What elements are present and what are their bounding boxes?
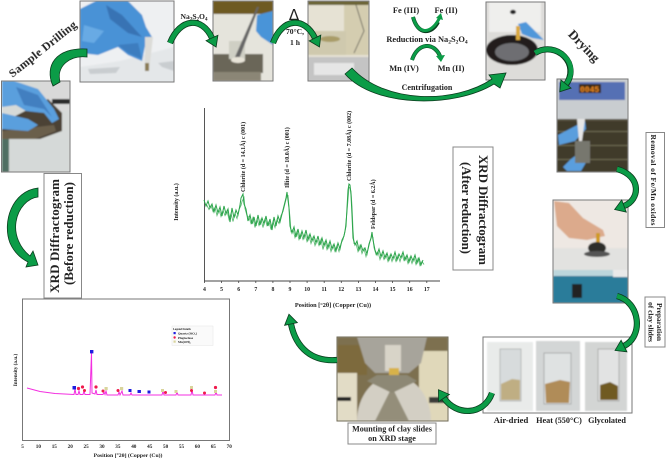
- box: preparation of clay slides: of clay slides: [646, 302, 656, 342]
- label: sodium dithionite: Na: [181, 12, 190, 21]
- x tick labels: 55: [179, 444, 184, 450]
- box: mounting of clay slides: Mounting of clay slides: [352, 424, 432, 434]
- quartz markers: [72, 350, 150, 394]
- peak labels: [239, 111, 377, 229]
- magenta trace: [27, 352, 222, 395]
- x tick labels: 6: [237, 287, 240, 293]
- photo: vortex mixer: [553, 200, 628, 303]
- x axis title: Position [°2θ] (Copper (Cu)): [295, 302, 371, 309]
- photo: drying oven: 0045: [580, 86, 599, 95]
- label: sodium dithionite: 2: [190, 18, 193, 22]
- legend: [172, 326, 213, 346]
- arrow: Mn IV to Mn II: [412, 46, 445, 62]
- label: heat: Heat (550°C): [536, 416, 582, 425]
- x tick labels: 8: [271, 287, 274, 293]
- photo: XRD stage: [337, 337, 448, 421]
- muscovite markers: [104, 386, 217, 393]
- box: mounting of clay slides: [348, 423, 436, 444]
- x tick labels: 14: [373, 287, 378, 293]
- x tick labels: [21, 444, 232, 450]
- heading: sample drilling: Sample Drilling: [6, 17, 79, 80]
- reduction scheme: S: [451, 35, 456, 44]
- reduction scheme: 4: [465, 40, 468, 46]
- label: glycolated: Glycolated: [588, 416, 626, 425]
- x tick labels: 16: [407, 287, 413, 293]
- arrow: Fe III to Fe II: [413, 13, 443, 31]
- box: XRD diffractogram after reduction: (After reduction): [459, 162, 474, 254]
- photo: weighing balance: [308, 1, 369, 81]
- peak labels: Chlorite (d = 14.1Å) c (001): [239, 122, 247, 192]
- label: temperature and time: 1 h: [290, 38, 301, 47]
- x tick labels: 12: [338, 287, 344, 293]
- x tick labels: 13: [356, 287, 361, 293]
- x tick labels: 40: [131, 444, 137, 450]
- label: sodium dithionite: O: [199, 12, 205, 21]
- legend: Quartz (SiO₂): [178, 332, 197, 336]
- x tick labels: 65: [211, 444, 216, 450]
- x tick labels: 10: [36, 444, 41, 450]
- reduction scheme: Mn (II): [438, 64, 465, 73]
- x tick labels: 15: [52, 444, 57, 450]
- box: mounting of clay slides: on XRD stage: [368, 434, 416, 443]
- x tick labels: 9: [289, 287, 292, 293]
- plagioclase markers: [77, 385, 217, 394]
- reduction scheme: [386, 6, 468, 73]
- box: preparation of clay slides: Preparation: [655, 303, 664, 341]
- slide: heated at 550 C: [536, 341, 580, 411]
- label: sodium dithionite: S: [192, 12, 197, 21]
- legend: Legend Details: [173, 328, 192, 331]
- box: removal of Fe/Mn oxides: Removal of Fe/Mn oxides: [649, 134, 658, 226]
- photo: centrifuge: [486, 2, 545, 80]
- peak labels: Feldspar (d = 6.2Å): [369, 179, 377, 229]
- box: XRD diffractogram after reduction: XRD Diffractogram: [476, 155, 491, 265]
- legend: Plagioclase: [178, 336, 194, 340]
- reduction scheme: O: [458, 35, 465, 44]
- reduction scheme: Reduction via Na: [386, 35, 448, 44]
- peak labels: Chlorite (d = 7.08Å) c (002): [345, 111, 353, 181]
- chart: diffractogram after reduction: [173, 108, 440, 309]
- arrow: before-reduction heading to diffractogram: [7, 188, 38, 267]
- y axis title: Intensity (a.u.): [173, 183, 180, 221]
- arrow: beaker to balance: [273, 23, 315, 43]
- arrow: balance to centrifuge: [345, 68, 506, 101]
- reduction scheme: Fe (III): [393, 6, 419, 15]
- box: XRD diffractogram before reduction: [44, 174, 82, 298]
- arrow: oven to vortex: [617, 169, 636, 206]
- y axis title: Intensity (a.u.): [12, 354, 19, 386]
- x tick labels: 15: [390, 287, 396, 293]
- chart: diffractogram before reduction: [12, 299, 232, 459]
- arrow: vortex to slides: [617, 296, 637, 346]
- photo: beaker on balance: [213, 1, 273, 81]
- x tick labels: 20: [68, 444, 73, 450]
- x tick labels: 5: [21, 444, 24, 450]
- x tick labels: 50: [163, 444, 169, 450]
- arrow: slides to XRD stage: [444, 393, 492, 411]
- box: preparation of clay slides: [645, 297, 665, 347]
- x tick labels: [203, 287, 430, 293]
- x tick labels: 17: [424, 287, 430, 293]
- label: centrifugation: Centrifugation: [402, 83, 453, 92]
- x tick labels: 25: [84, 444, 89, 450]
- slide: glycolated: [585, 342, 627, 411]
- x tick labels: 10: [304, 287, 310, 293]
- photo: gloved hand with tube: [80, 1, 174, 82]
- photo: drying oven: [557, 79, 628, 172]
- reduction scheme: Fe (II): [434, 6, 458, 15]
- x tick labels: 4: [203, 287, 206, 293]
- x tick labels: 60: [195, 444, 200, 450]
- heading: drying: Drying: [565, 27, 604, 65]
- box: XRD diffractogram before reduction: XRD Diffractogram: [47, 179, 62, 293]
- x tick labels: 70: [227, 444, 232, 450]
- x tick labels: 35: [115, 444, 121, 450]
- photo: hand on rock sample: [2, 81, 70, 172]
- legend: Mn(OH)₂: [178, 340, 191, 344]
- box: removal of Fe/Mn oxides: [646, 132, 664, 228]
- slide: air-dried: [487, 342, 533, 411]
- peak labels: Illite (d = 10.0Å) c (001): [283, 127, 291, 188]
- x axis title: Position [°2θ] (Copper (Cu)): [94, 452, 163, 459]
- x tick labels: 45: [147, 444, 153, 450]
- box: XRD diffractogram before reduction: (Before reduction): [61, 182, 76, 285]
- arrow: rock to glove photo: [50, 49, 87, 86]
- x tick labels: 11: [321, 287, 327, 293]
- label: sodium dithionite: 4: [205, 18, 208, 22]
- x tick labels: 7: [254, 287, 257, 293]
- arrow: XRD stage to after-reduction diffractogram: [291, 324, 337, 360]
- label: sodium dithionite: 2: [197, 18, 200, 22]
- arrow: centrifuge to oven: [535, 49, 571, 86]
- panel: clay slides: [483, 337, 632, 413]
- reduction scheme: 2: [448, 40, 451, 46]
- x tick labels: 30: [99, 444, 105, 450]
- label: air-dried: Air-dried: [494, 415, 528, 425]
- arrow: tube to beaker: [170, 23, 212, 43]
- x tick labels: 5: [220, 287, 223, 293]
- label: delta heat symbol: Δ: [289, 6, 300, 24]
- reduction scheme: Mn (IV): [389, 64, 419, 73]
- green trace: [204, 184, 424, 266]
- label: temperature and time: 70°C,: [286, 27, 304, 36]
- box: XRD diffractogram after reduction: [453, 147, 493, 270]
- reduction scheme: 2: [456, 40, 459, 46]
